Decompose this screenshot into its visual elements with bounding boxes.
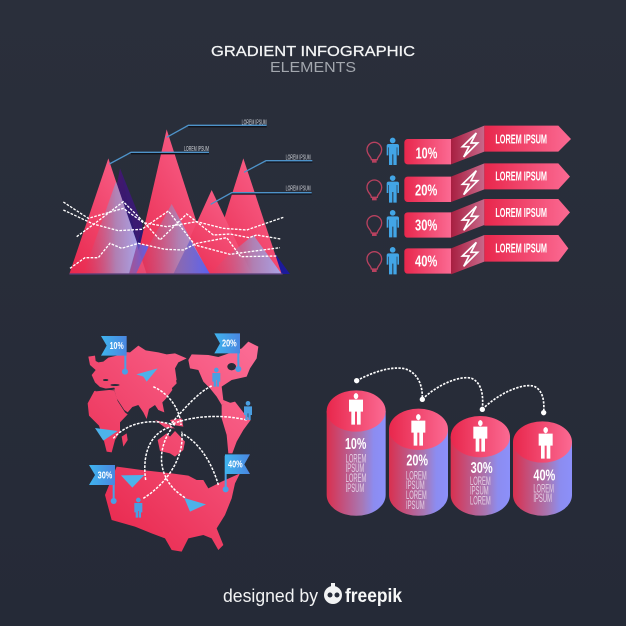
cylinder 20%: IPSUM <box>406 479 425 492</box>
red peak 1 <box>69 158 147 274</box>
panel: mountain chart <box>63 117 312 275</box>
map: eurasia <box>88 346 187 419</box>
flag 20% <box>214 333 241 372</box>
map: africa <box>88 390 128 452</box>
red peak 2 <box>133 129 213 274</box>
cylinder 30%: LOREM <box>470 475 491 488</box>
callout lines <box>131 126 312 194</box>
panel: mountain chart: LOREM IPSUM <box>286 184 311 193</box>
flag 10%: 10% <box>110 341 124 352</box>
baseline <box>69 273 283 275</box>
ribbon row 4 <box>367 235 568 274</box>
map: australia <box>158 431 185 457</box>
blue peak 2 <box>173 240 210 274</box>
red peak 3 <box>173 190 252 274</box>
ribbon row 4: 40% <box>415 253 438 270</box>
footer credit: freepik <box>345 586 402 607</box>
icon: freepik mascot <box>324 583 342 604</box>
lavender peak 3 <box>210 235 282 274</box>
ribbon row 3: LOREM IPSUM <box>495 206 547 220</box>
cylinder 20%: 20% <box>406 453 428 470</box>
cylinder 30%: 30% <box>471 460 493 477</box>
flag 30% <box>89 465 117 504</box>
ribbon row 2: 20% <box>415 183 438 200</box>
paper planes <box>95 368 206 512</box>
dotted connectors <box>357 368 544 413</box>
dark back triangle <box>100 168 150 274</box>
cylinder 20% <box>389 409 448 516</box>
ribbon row 1: 10% <box>416 146 438 163</box>
cylinder 20%: IPSUM <box>406 499 425 512</box>
dark sliver <box>120 168 143 243</box>
cylinder 10%: 10% <box>345 436 367 453</box>
cylinder 10%: IPSUM <box>346 462 364 475</box>
flag 20%: 20% <box>222 338 237 349</box>
map: north america <box>188 342 258 405</box>
cylinder 30% <box>451 416 510 516</box>
cylinder 20%: LOREM <box>406 469 427 482</box>
ribbon row 1 <box>367 126 571 165</box>
footer credit: designed by <box>223 586 318 606</box>
title <box>211 43 415 76</box>
panel: cylinders <box>327 368 572 516</box>
callout labels: LOREM IPSUM <box>184 144 209 153</box>
cylinder 40%: LOREM <box>533 482 554 495</box>
lavender peak 1 <box>83 182 137 274</box>
ribbon row 1: LOREM IPSUM <box>495 132 547 146</box>
cylinder 10%: LOREM <box>346 472 366 485</box>
flag 10% <box>101 336 128 375</box>
dark right corner <box>263 247 290 274</box>
map people <box>134 368 252 518</box>
dashed routes <box>113 386 247 498</box>
title: GRADIENT INFOGRAPHIC <box>211 43 415 60</box>
ribbon row 2 <box>367 163 570 203</box>
ribbon row 4: LOREM IPSUM <box>495 242 547 256</box>
red peak 4 <box>207 158 282 274</box>
ribbon row 2: LOREM IPSUM <box>495 170 547 184</box>
cylinder 10%: IPSUM <box>346 482 364 495</box>
cylinder 30%: LOREM <box>470 495 491 508</box>
panel: world map <box>88 333 258 552</box>
cylinder 40% <box>513 421 572 516</box>
map: lakes <box>96 363 236 496</box>
cylinder 20%: LOREM <box>406 489 427 502</box>
blue shard 1 <box>129 243 149 274</box>
flag 40% <box>223 454 250 492</box>
cylinder 10% <box>327 390 386 516</box>
map: united states <box>105 467 240 552</box>
cylinder 40%: IPSUM <box>533 492 552 505</box>
map: south america <box>222 402 251 453</box>
cylinder 30%: IPSUM <box>470 485 489 498</box>
map: islands <box>122 375 183 447</box>
title: ELEMENTS <box>270 59 356 76</box>
flag 30%: 30% <box>98 470 113 481</box>
panel: percentage ribbons <box>367 126 571 274</box>
callout labels <box>184 117 311 193</box>
lavender peak 2 <box>133 204 209 274</box>
cylinder 40%: 40% <box>533 467 556 484</box>
cylinder 10%: LOREM <box>346 452 366 465</box>
dashed series lines <box>63 202 283 268</box>
callout labels: LOREM IPSUM <box>242 117 267 126</box>
ribbon row 3 <box>367 199 570 238</box>
panel: mountain chart: LOREM IPSUM <box>286 152 311 161</box>
footer credit <box>223 583 402 607</box>
ribbon row 3: 30% <box>415 218 438 235</box>
flag 40%: 40% <box>228 460 243 471</box>
